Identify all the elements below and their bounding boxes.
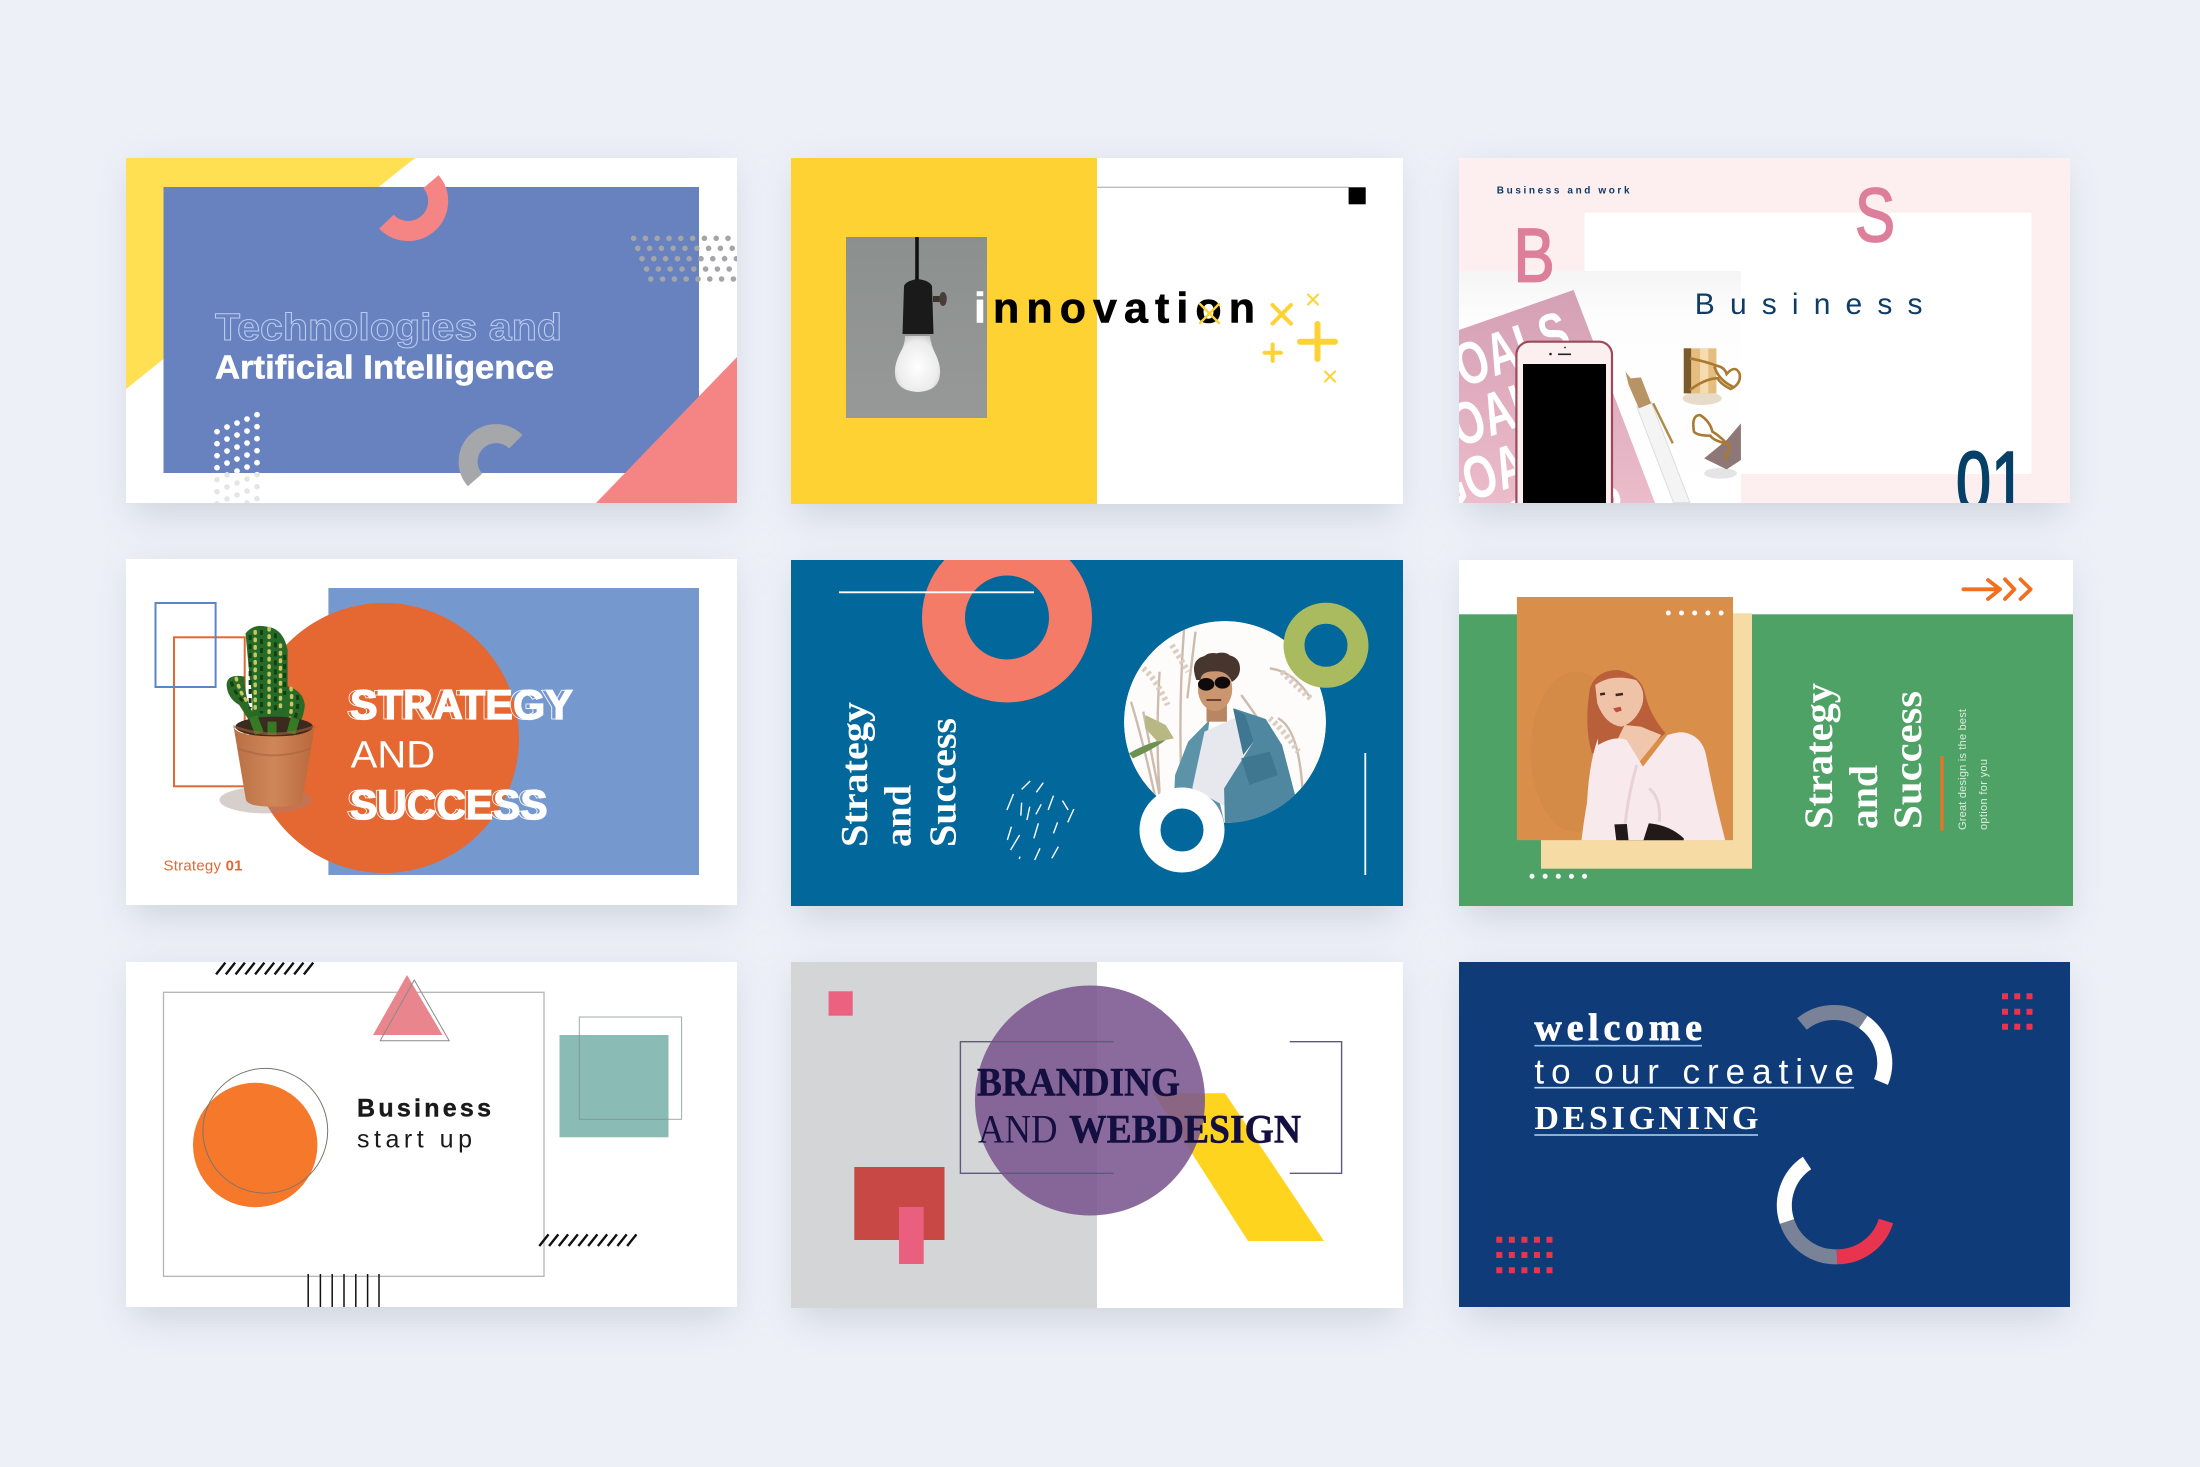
heading: business: Business — [1695, 288, 1922, 321]
red squares bottom left — [1496, 1240, 1553, 1270]
panel: strategy and success green slide — [1459, 560, 2073, 906]
hatch marks top — [216, 963, 313, 974]
gray dot grid — [634, 238, 740, 279]
blue frame — [156, 603, 216, 687]
letter S: S — [1855, 174, 1895, 258]
dots on green — [1532, 874, 1585, 879]
vertical bars — [308, 1274, 379, 1307]
vertical line — [1364, 753, 1366, 875]
outline square — [579, 1017, 682, 1119]
photo: potted cactus — [219, 626, 315, 813]
heading: branding and webdesign — [977, 1060, 1301, 1151]
heading: STRATEGY: STRATEGY — [346, 681, 568, 728]
photo: desk flat lay with phone: GOALS — [1414, 298, 1578, 410]
vertical heading: Success — [1885, 691, 1930, 829]
text: business start up — [357, 1095, 491, 1153]
white rectangle — [1585, 213, 2032, 474]
text: business start up: start up — [357, 1125, 472, 1153]
photo: desk flat lay with phone: GOALS — [1422, 412, 1586, 524]
panel: strategy and success portrait slide — [791, 554, 1403, 906]
horizontal line — [839, 591, 1034, 593]
text: business start up: Business — [357, 1095, 491, 1123]
heading: branding and webdesign: AND — [978, 1106, 1058, 1151]
white ring — [1150, 798, 1214, 862]
underline — [1534, 1087, 1854, 1089]
heading: innovation: innovation — [974, 285, 1255, 333]
red squares top right — [2002, 996, 2033, 1027]
vertical heading: and — [878, 785, 920, 847]
pink triangle — [373, 975, 442, 1035]
blue rectangle — [164, 187, 699, 473]
panel: branding and webdesign slide — [791, 962, 1403, 1308]
bracket frames — [960, 1042, 1342, 1173]
vertical heading: Strategy — [834, 702, 876, 847]
teal square — [560, 1035, 668, 1137]
yellow corner shape — [126, 158, 415, 389]
vertical body text: Great design is the best — [1957, 709, 1969, 830]
small caption: Business and work — [1497, 186, 1630, 197]
heading: STRATEGY — [347, 689, 574, 720]
number 01: 01 — [1956, 435, 2026, 530]
orange circle — [249, 603, 519, 873]
heading: SUCCESS: SUCCESS — [350, 781, 548, 828]
black square — [1349, 187, 1366, 204]
outlined heading: Technologies and — [215, 307, 562, 349]
photo: desk flat lay with phone: GOALS — [1465, 455, 1629, 567]
heading: welcome: welcome — [1534, 1007, 1702, 1049]
heading: branding and webdesign: WEBDESIGN — [1069, 1106, 1301, 1151]
coral arc — [386, 182, 438, 231]
underline — [1534, 1134, 1758, 1136]
dots on photo — [1668, 610, 1722, 616]
yellow crosses and plus signs — [1200, 294, 1335, 382]
arrow with chevrons — [1963, 579, 2031, 599]
gray arc — [468, 434, 516, 480]
cream rectangle — [1541, 613, 1752, 869]
yellow parallelogram — [1154, 1093, 1324, 1241]
underline — [1534, 1045, 1702, 1047]
heading: to our creative: to our creative — [1534, 1052, 1854, 1091]
heading: SUCCESS: SUCCESS — [346, 781, 544, 828]
orange bar — [1940, 756, 1944, 831]
pink bar — [899, 1207, 924, 1264]
vertical body text: option for you — [1978, 759, 1990, 830]
coral triangle — [596, 357, 737, 503]
outline circle — [203, 1068, 328, 1193]
vertical heading: Strategy — [1796, 683, 1841, 829]
hatch marks right — [539, 1234, 636, 1246]
panel: strategy and success cactus slide — [126, 559, 737, 905]
panel: welcome to our creative designing slide — [1459, 962, 2070, 1307]
orange circle — [193, 1083, 317, 1207]
dash pattern — [1007, 781, 1074, 860]
panel: innovation slide — [791, 158, 1403, 504]
lower ring arc — [1784, 1163, 1886, 1257]
large outline square — [164, 992, 544, 1276]
infographic canvas — [121, 158, 2078, 1330]
heading: branding and webdesign: BRANDING — [977, 1060, 1180, 1105]
small pink square — [829, 991, 853, 1016]
caption: strategy 01: Strategy 01 — [164, 858, 242, 875]
photo: desk flat lay with phone: GOALS — [1410, 358, 1574, 470]
thin line — [1097, 186, 1349, 188]
photo: desk flat lay with phone — [1459, 271, 1742, 503]
vertical heading: Success — [922, 718, 964, 847]
photo: man in denim jacket — [1124, 621, 1326, 825]
green ring — [1294, 613, 1358, 677]
panel: technologies and artificial intelligence slide — [126, 158, 740, 510]
bold heading: Artificial Intelligence — [215, 349, 554, 386]
yellow half — [791, 158, 1097, 504]
heading: SUCCESS — [347, 789, 547, 820]
letter B: B — [1514, 213, 1555, 298]
panel: business slide — [1459, 158, 2070, 503]
photo: light bulb — [846, 237, 987, 418]
heading: DESIGNING: DESIGNING — [1534, 1100, 1758, 1137]
vertical heading — [834, 702, 964, 847]
outline triangle — [380, 980, 449, 1041]
light dot grid — [217, 415, 257, 510]
coral ring — [944, 554, 1070, 681]
orange frame — [174, 637, 245, 786]
heading: AND: AND — [351, 735, 435, 777]
green block — [1459, 614, 2073, 906]
blue rectangle — [328, 588, 699, 875]
purple circle — [975, 986, 1205, 1216]
photo: woman on orange wall — [1517, 597, 1733, 846]
gray half — [791, 962, 1097, 1308]
vertical heading: and — [1841, 765, 1886, 829]
panel: business start up slide — [126, 962, 737, 1307]
red square — [854, 1167, 944, 1240]
vertical heading — [1796, 683, 1930, 829]
upper ring arc — [1802, 1012, 1885, 1082]
heading: STRATEGY: STRATEGY — [350, 681, 573, 728]
vertical body text — [1957, 709, 1990, 830]
